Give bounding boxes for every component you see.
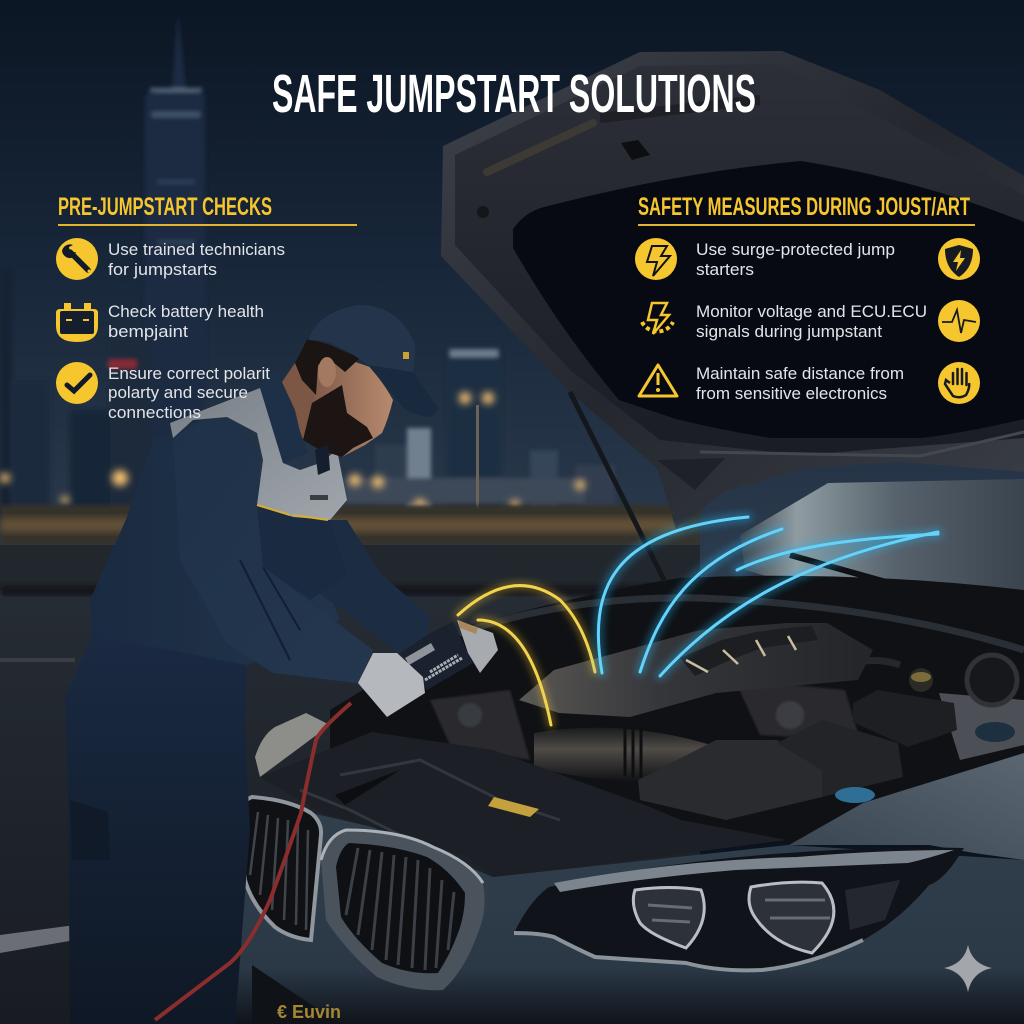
grey yoke <box>170 388 347 520</box>
test meter <box>400 622 473 690</box>
text: from sensitive electronics: from sensitive electronics <box>696 385 887 403</box>
text: ensure correct polarity: Ensure correct polarit <box>108 365 270 383</box>
text: connections: connections <box>108 404 201 422</box>
fender <box>789 753 1024 860</box>
beard <box>303 385 373 457</box>
text: monitor voltage: Monitor voltage and ECU.ECU <box>696 303 927 321</box>
icon: lightning circle <box>635 238 677 280</box>
radiator cover <box>260 732 787 877</box>
engine bay <box>330 576 1024 850</box>
panel: pre-jumpstart checks <box>56 193 357 422</box>
neck <box>282 363 335 440</box>
text: maintain safe distance: Maintain safe distance from <box>696 365 904 383</box>
icon: battery <box>56 303 98 342</box>
bumper badge plate <box>252 965 340 1024</box>
engine parts <box>534 655 1017 820</box>
kidney grille <box>240 797 485 1024</box>
jacket torso <box>90 420 340 665</box>
heading: pre-jumpstart checks: PRE-JUMPSTART CHECKS <box>58 193 272 221</box>
text: check battery health: Check battery health <box>108 303 264 321</box>
waterfront ground and road <box>0 505 700 1024</box>
text: signals during: signals during jumpstant <box>696 323 882 341</box>
intake tube <box>534 728 711 781</box>
collar <box>260 370 308 463</box>
trousers <box>65 633 250 1024</box>
icon: bolt with dashed arc <box>642 303 673 334</box>
chest panel <box>257 505 347 600</box>
windshield behind the hood <box>740 479 1024 625</box>
near glove <box>358 653 425 717</box>
icon: warning triangle <box>639 365 677 396</box>
far glove <box>457 620 498 673</box>
near arm <box>173 420 373 683</box>
icon: check mark <box>56 362 98 404</box>
text: bempjaint: bempjaint <box>108 323 188 341</box>
panel: safety measures during jumpstart <box>635 193 980 404</box>
icon: pulse <box>938 300 980 342</box>
ear <box>318 357 336 387</box>
kidney grille: € Euvin <box>277 1002 341 1022</box>
energy arcs: blue <box>598 517 938 676</box>
mechanic <box>65 305 498 1024</box>
text: use surge-protected: Use surge-protected jump <box>696 241 895 259</box>
text: for jumpstarts: for jumpstarts <box>108 261 217 279</box>
baseball cap <box>308 305 438 417</box>
far arm <box>293 515 430 653</box>
text: use trained technicians: Use trained technicians <box>108 241 285 259</box>
icon: hand <box>938 362 980 404</box>
icon: wrench <box>56 238 98 280</box>
icon: shield <box>938 238 980 280</box>
headlight <box>514 848 964 970</box>
open car hood <box>441 51 1024 582</box>
air box <box>638 740 822 820</box>
background: night sky <box>0 0 1024 610</box>
sparkle watermark <box>944 945 992 992</box>
engine cover <box>519 623 873 717</box>
city skyline <box>0 12 615 520</box>
red jumper cable <box>155 703 351 1020</box>
face <box>312 350 393 457</box>
text: polarty and secure: polarty and secure <box>108 384 248 402</box>
car front body and bumper <box>232 713 1024 1024</box>
energy arcs: yellow <box>458 586 595 725</box>
hair <box>295 338 360 395</box>
text: starters: starters <box>696 261 754 279</box>
